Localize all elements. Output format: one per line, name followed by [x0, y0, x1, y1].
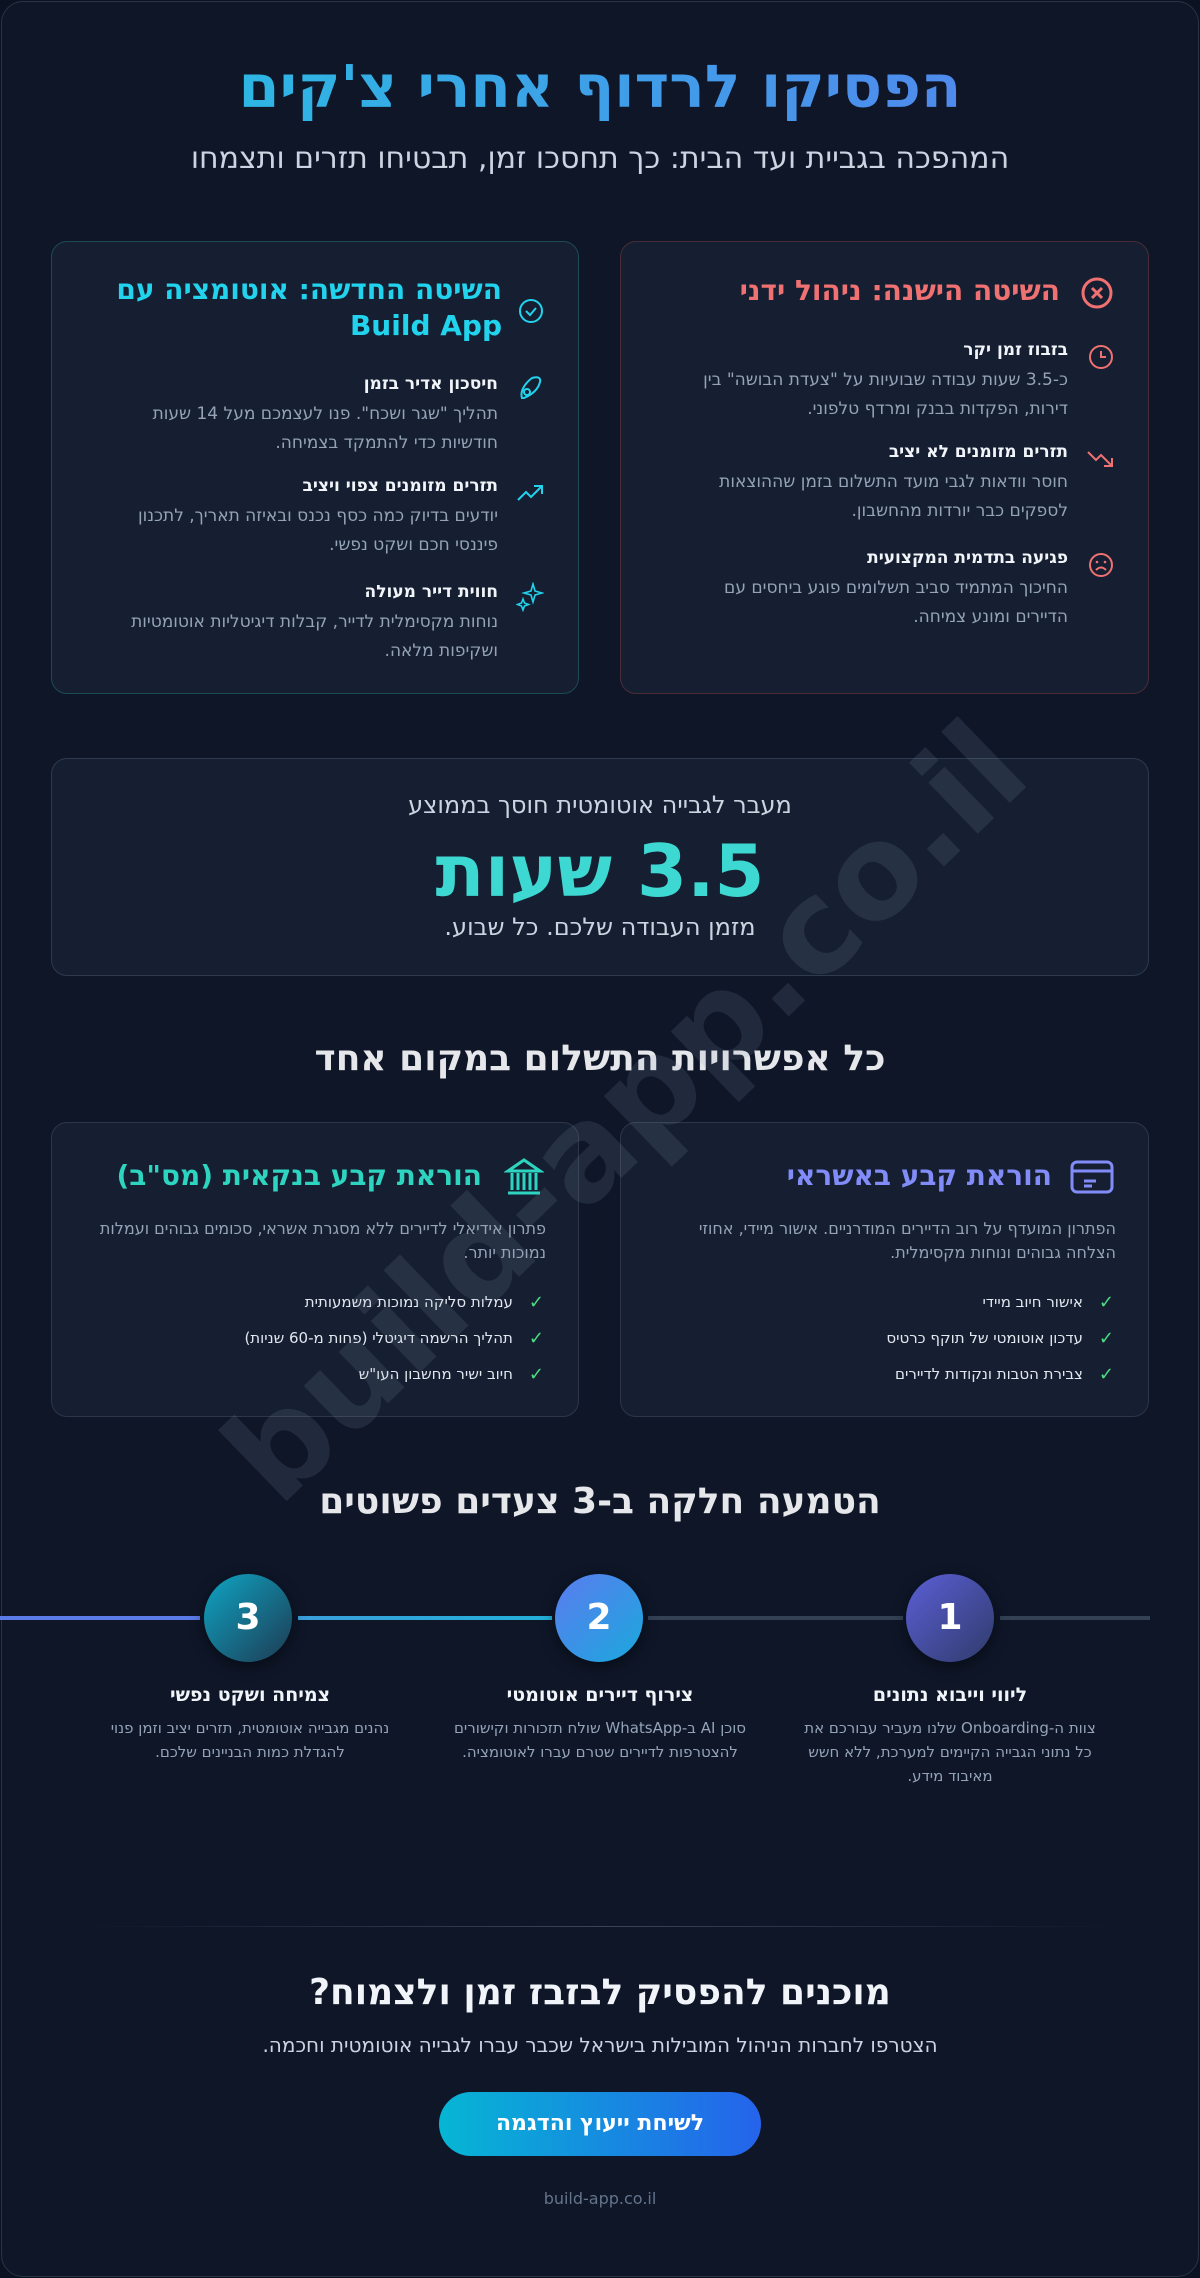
- step circle 2: 2: [586, 1597, 612, 1638]
- CTA button: [439, 2092, 761, 2156]
- step 3 text: נהנים מגבייה אוטומטית, תזרים יציב וזמן פנוי להגדלת כמות הבניינים שלכם.: [111, 1719, 389, 1761]
- checklist: [886, 1292, 1114, 1384]
- heading: payment options: כל אפשרויות התשלום במקום אחד: [315, 1038, 885, 1079]
- step 2 text: [454, 1684, 746, 1761]
- item: time saving: [152, 374, 498, 453]
- heading: old method: השיטה הישנה: ניהול ידני: [740, 274, 1060, 307]
- panel: old method: [620, 241, 1149, 694]
- step circle 1: 1: [937, 1597, 963, 1638]
- checklist: ✓: [529, 1364, 544, 1384]
- watermark: build-app.co.il: [195, 692, 1056, 1531]
- icon: rocket: [520, 376, 542, 399]
- title: [0, 52, 1200, 121]
- checklist: ✓: [529, 1292, 544, 1312]
- icon: sparkles: [516, 582, 544, 612]
- item: unstable cash: תזרים מזומנים לא יציב: [889, 442, 1068, 462]
- panel: new method: [51, 241, 579, 694]
- item: time saving: חיסכון אדיר בזמן: [364, 374, 498, 394]
- timeline: [0, 1574, 1150, 1667]
- checklist: ✓: [1099, 1292, 1114, 1312]
- icon: sad face: [1089, 553, 1113, 577]
- stat number: 3.5 שעות: [435, 829, 765, 913]
- CTA heading: מוכנים להפסיק לבזבז זמן ולצמוח?: [309, 1972, 891, 2013]
- step circle 2: [555, 1574, 643, 1662]
- item: time saving: תהליך "שגר ושכח". פנו לעצמכם מעל 14 שעות חודשיות כדי להתמקד בצמיחה.: [153, 404, 498, 453]
- step 1 text: ליווי וייבוא נתונים: [873, 1684, 1027, 1706]
- checklist: ✓: [529, 1328, 544, 1348]
- item: time waste: [703, 340, 1068, 419]
- panel: bank: [51, 1122, 579, 1417]
- item: reputation: פגיעה בתדמית המקצועית: [867, 548, 1068, 568]
- item: predictable cash: [138, 476, 498, 555]
- item: time waste: בזבוז זמן יקר: [963, 340, 1068, 360]
- step 2 text: סוכן AI ב-WhatsApp שולח תזכורות וקישורים להצטרפות לדיירים שטרם עברו לאוטומציה.: [454, 1719, 746, 1761]
- checklist: [244, 1292, 544, 1384]
- checklist: ✓: [1099, 1364, 1114, 1384]
- checklist: אישור חיוב מיידי: [982, 1293, 1083, 1311]
- heading: steps: הטמעה חלקה ב-3 צעדים פשוטים: [319, 1481, 881, 1522]
- item: predictable cash: יודעים בדיוק כמה כסף נכנס ובאיזה תאריך, לתכנון פיננסי חכם ושקט נפשי.: [138, 506, 498, 555]
- item: tenant experience: [131, 582, 498, 661]
- heading: credit: הוראת קבע באשראי: [787, 1159, 1052, 1192]
- description: פתרון אידיאלי לדיירים ללא מסגרת אשראי, סכומים גבוהים ועמלות נמוכות יותר.: [100, 1219, 546, 1262]
- step 3 text: צמיחה ושקט נפשי: [170, 1684, 330, 1706]
- step 1 text: [804, 1684, 1096, 1785]
- icon: x circle: [1082, 278, 1112, 308]
- step 3 text: [111, 1684, 389, 1761]
- step circle 1: [906, 1574, 994, 1662]
- icon: check circle: [519, 299, 543, 323]
- icon: card: [1070, 1160, 1114, 1194]
- stat label: מעבר לגבייה אוטומטית חוסך בממוצע: [408, 791, 792, 819]
- footer: build-app.co.il: [544, 2189, 656, 2208]
- checklist: עמלות סליקה נמוכות משמעותית: [305, 1293, 513, 1311]
- step circle 3: 3: [235, 1597, 261, 1638]
- checklist: ✓: [1099, 1328, 1114, 1348]
- title: הפסיקו לרדוף אחרי צ'קים: [239, 52, 961, 121]
- item: tenant experience: נוחות מקסימלית לדייר, קבלות דיגיטליות אוטומטיות ושקיפות מלאה.: [131, 612, 498, 661]
- icon: trend down: [1087, 451, 1113, 467]
- item: reputation: החיכוך המתמיד סביב תשלומים פוגע ביחסים עם הדיירים ומונע צמיחה.: [724, 578, 1068, 627]
- stat callout: [51, 758, 1149, 976]
- checklist: חיוב ישיר מחשבון העו"ש: [359, 1365, 513, 1383]
- subtitle: המהפכה בגביית ועד הבית: כך תחסכו זמן, תבטיחו תזרים ותצמחו: [191, 141, 1009, 176]
- CTA button: לשיחת ייעוץ והדגמה: [496, 2111, 704, 2136]
- item: unstable cash: [719, 442, 1068, 521]
- checklist: צבירת הטבות ונקודות לדיירים: [895, 1365, 1083, 1383]
- panel: credit card: [620, 1122, 1149, 1417]
- item: time waste: כ-3.5 שעות עבודה שבועיות על "צעדת הבושה" בין דירות, הפקדות בבנק ומרדף טלפוני.: [703, 370, 1068, 419]
- description: הפתרון המועדף על רוב הדיירים המודרניים. אישור מיידי, אחוזי הצלחה גבוהים ונוחות מקסימלית.: [699, 1219, 1116, 1262]
- checklist: תהליך הרשמה דיגיטלי (פחות מ-60 שניות): [244, 1329, 513, 1347]
- heading: bank: הוראת קבע בנקאית (מס"ב): [116, 1159, 482, 1192]
- step circle 3: [204, 1574, 292, 1662]
- step 2 text: צירוף דיירים אוטומטי: [507, 1684, 693, 1706]
- icon: clock: [1089, 345, 1113, 369]
- icon: bank: [504, 1158, 544, 1194]
- stat caption: מזמן העבודה שלכם. כל שבוע.: [444, 913, 756, 941]
- item: predictable cash: תזרים מזומנים צפוי ויציב: [303, 476, 498, 496]
- step 1 text: צוות ה-Onboarding שלנו מעביר עבורכם את כל נתוני הגבייה הקיימים למערכת, ללא חשש מאיבוד מידע.: [804, 1719, 1096, 1785]
- checklist: עדכון אוטומטי של תוקף כרטיס: [886, 1329, 1083, 1347]
- icon: trend up: [517, 485, 543, 501]
- item: tenant experience: חווית דייר מעולה: [365, 582, 498, 602]
- item: reputation: [724, 548, 1068, 627]
- item: unstable cash: חוסר וודאות לגבי מועד התשלום בזמן שההוצאות לספקים כבר יורדות מהחשבון.: [719, 472, 1068, 521]
- CTA subtext: הצטרפו לחברות הניהול המובילות בישראל שכבר עברו לגבייה אוטומטית וחכמה.: [262, 2033, 938, 2057]
- heading: new method: השיטה החדשה: אוטומציה עם Build App: [116, 273, 502, 342]
